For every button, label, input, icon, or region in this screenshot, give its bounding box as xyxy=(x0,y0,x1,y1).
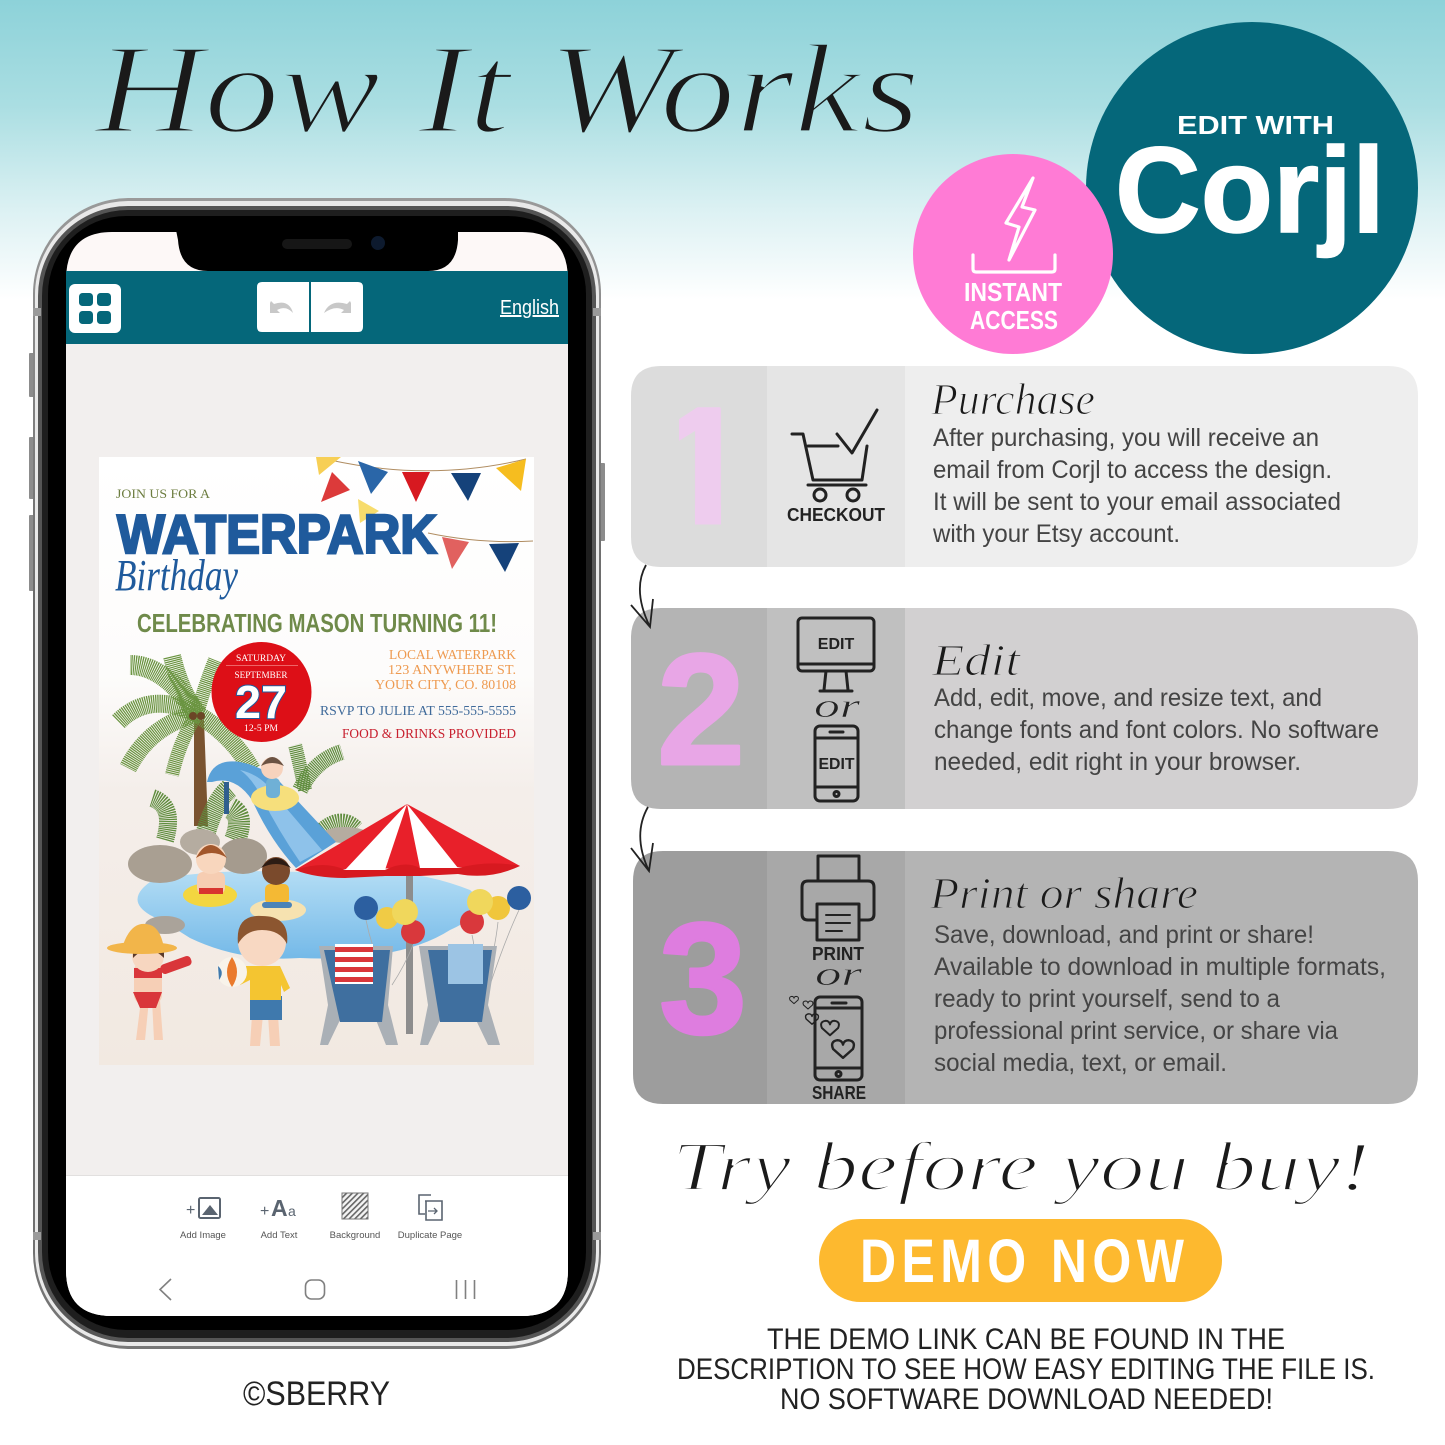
demo now button: DEMO NOW xyxy=(860,1227,1184,1295)
tool: add image: Add Image xyxy=(180,1230,226,1241)
tool: duplicate page: Duplicate Page xyxy=(398,1230,462,1241)
invitation card xyxy=(99,457,534,1065)
step text: change fonts and font colors. No software xyxy=(934,716,1379,744)
icon: phone edit: EDIT xyxy=(818,756,855,773)
illustration: palm tree xyxy=(118,656,252,826)
tool: add image xyxy=(180,1198,226,1241)
step text: After purchasing, you will receive an xyxy=(933,424,1319,452)
panel: step 2 edit xyxy=(631,608,1418,809)
icon: phone with hearts xyxy=(790,996,866,1103)
illustration: girl with water gun xyxy=(107,924,193,1040)
icon: checkout cart: CHECKOUT xyxy=(787,505,885,525)
event details: RSVP TO JULIE AT 555-555-5555 xyxy=(320,703,516,718)
invitation headline: JOIN US FOR A xyxy=(116,486,211,501)
tool: add text xyxy=(260,1195,298,1241)
step text: professional print service, or share via xyxy=(934,1017,1338,1045)
tool: background xyxy=(330,1193,380,1241)
date badge: 27 xyxy=(235,676,287,728)
tool: add text: Add Text xyxy=(261,1230,298,1241)
illustration: rocks xyxy=(128,827,369,934)
step text xyxy=(934,684,1379,776)
language link: English xyxy=(500,297,559,319)
invitation card: Birthday xyxy=(115,551,238,600)
step text: Save, download, and print or share! xyxy=(934,921,1314,949)
demo description: THE DEMO LINK CAN BE FOUND IN THE xyxy=(767,1323,1285,1356)
tool: add text: A xyxy=(271,1195,288,1221)
try before you buy heading: Try before you buy! xyxy=(672,1129,1370,1206)
invitation card: WATERPARK xyxy=(117,503,437,565)
badge: instant access: ACCESS xyxy=(970,305,1058,335)
event details: LOCAL WATERPARK xyxy=(389,647,516,662)
icon: printer: PRINT xyxy=(812,944,864,964)
step text xyxy=(932,424,1341,548)
icon: phone edit xyxy=(815,726,858,801)
illustration: children in pool xyxy=(183,757,306,921)
illustration: bushes xyxy=(152,745,355,840)
side buttons xyxy=(29,353,605,591)
illustration: beach chairs xyxy=(319,944,500,1045)
date badge: SATURDAY xyxy=(236,654,286,664)
demo now button xyxy=(819,1219,1222,1302)
demo description: NO SOFTWARE DOWNLOAD NEEDED! xyxy=(780,1383,1273,1416)
panel: step 1 purchase xyxy=(631,366,1418,567)
badge: instant access xyxy=(913,154,1113,354)
step text: needed, edit right in your browser. xyxy=(934,748,1301,776)
tool: add text: a xyxy=(288,1203,296,1219)
phone mockup xyxy=(29,198,605,1349)
or label: or xyxy=(815,956,863,993)
step text: social media, text, or email. xyxy=(934,1049,1227,1077)
date badge xyxy=(212,642,312,742)
icon: desktop edit: EDIT xyxy=(818,636,854,653)
girl on slide xyxy=(251,757,299,811)
icon: phone with hearts: SHARE xyxy=(812,1083,866,1103)
demo description xyxy=(677,1323,1375,1416)
step text: email from Corjl to access the design. xyxy=(933,456,1332,484)
illustration: umbrella xyxy=(295,804,520,1034)
phone screen xyxy=(66,230,568,1316)
heading: Print or share xyxy=(929,869,1198,918)
tool: duplicate page xyxy=(398,1195,462,1241)
number 1: 1 xyxy=(658,374,750,559)
or label: or xyxy=(814,688,861,725)
number 3: 3 xyxy=(659,891,747,1067)
icon: menu grid button xyxy=(69,284,121,333)
number 2: 2 xyxy=(657,622,745,798)
android navigation bar xyxy=(160,1279,474,1300)
badge: instant access: INSTANT xyxy=(964,277,1062,307)
date badge: 12-5 PM xyxy=(244,724,279,734)
event details: 123 ANYWHERE ST. xyxy=(388,662,516,677)
step text xyxy=(934,921,1386,1077)
undo redo buttons xyxy=(257,282,363,332)
child on float xyxy=(250,857,306,921)
copyright: ©SBERRY xyxy=(243,1375,390,1413)
step text: with your Etsy account. xyxy=(932,520,1180,548)
notch xyxy=(176,230,458,271)
antenna bands xyxy=(33,308,601,1240)
tool: add text: + xyxy=(260,1203,269,1220)
icon: lightning bolt download xyxy=(973,178,1055,272)
badge: edit with Corjl: EDIT WITH xyxy=(1177,110,1334,140)
icon: desktop edit xyxy=(798,618,874,691)
app header bar xyxy=(66,271,568,344)
illustration: water slide xyxy=(207,761,336,868)
arrow: step 1 to 2 xyxy=(631,565,653,627)
step text: Add, edit, move, and resize text, and xyxy=(934,684,1322,712)
event details xyxy=(320,647,516,741)
event details: FOOD & DRINKS PROVIDED xyxy=(342,726,516,741)
badge: edit with Corjl xyxy=(1086,22,1418,354)
arrow: step 2 to 3 xyxy=(631,807,653,871)
boy on ring xyxy=(183,844,237,907)
editor toolbar xyxy=(180,1193,462,1241)
background gradient xyxy=(0,0,1445,300)
tool: add image: + xyxy=(186,1202,195,1219)
illustration: pool xyxy=(138,869,479,959)
icon: printer xyxy=(802,856,874,964)
title: How It Works xyxy=(93,18,920,160)
bunting xyxy=(316,457,533,572)
event details: YOUR CITY, CO. 80108 xyxy=(375,677,516,692)
illustration: boy with beach ball xyxy=(217,916,290,1046)
step text: It will be sent to your email associated xyxy=(933,488,1341,516)
step text: ready to print yourself, send to a xyxy=(934,985,1280,1013)
panel: step 3 print or share xyxy=(633,851,1418,1104)
step text: Available to download in multiple formats, xyxy=(934,953,1386,981)
date badge: SEPTEMBER xyxy=(234,671,288,681)
illustration: balloons xyxy=(354,886,531,985)
invitation card: CELEBRATING MASON TURNING 11! xyxy=(137,608,497,638)
heading: Edit xyxy=(931,636,1022,685)
tool: background: Background xyxy=(330,1230,380,1241)
heading: Purchase xyxy=(930,375,1095,424)
icon: checkout cart xyxy=(787,410,885,525)
badge: edit with Corjl: Corjl xyxy=(1115,122,1385,258)
